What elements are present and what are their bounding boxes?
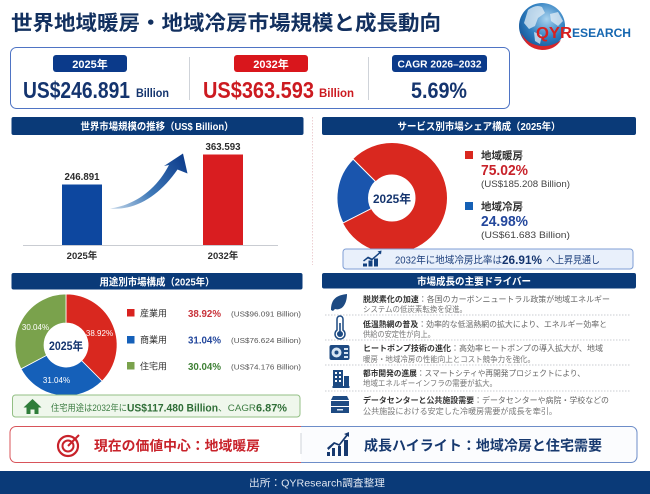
icon: leaf bbox=[331, 294, 347, 311]
highlight: growth: 成長ハイライト：地域冷房と住宅需要 bbox=[364, 438, 602, 454]
panel: growth drivers bbox=[322, 273, 636, 416]
donut chart: application: 30.04% bbox=[22, 323, 49, 332]
legend: district heating bbox=[465, 149, 570, 189]
donut chart: service share bbox=[337, 159, 431, 237]
heading: market size: 世界市場規模の推移（US$ Billion） bbox=[80, 120, 234, 133]
KPI: 2032 value: 2032年 bbox=[253, 57, 289, 71]
heading: market size bbox=[12, 117, 304, 135]
title: 世界地域暖房・地域冷房市場規模と成長動向 bbox=[11, 11, 441, 35]
icon: growth chart bbox=[327, 432, 349, 456]
legend: commercial bbox=[127, 334, 302, 346]
bar: 2025: 2025年 bbox=[67, 250, 98, 262]
icon: target bbox=[58, 435, 79, 456]
legend: district cooling: (US$61.683 Billion) bbox=[481, 230, 570, 240]
logo: QYResearch: ESEARCH bbox=[572, 26, 631, 40]
KPI: 2025 value bbox=[23, 55, 169, 103]
driver: decarbonization: 脱炭素化の加速：各国のカーボンニュートラル政策が地域エネルギー bbox=[363, 294, 610, 304]
icon: server stack bbox=[331, 396, 349, 413]
donut chart: application: 38.92% bbox=[86, 329, 113, 338]
callout: cooling share 2032 bbox=[343, 249, 633, 269]
driver: data centers bbox=[331, 395, 609, 416]
bar: 2025: 246.891 bbox=[64, 171, 100, 183]
legend: residential: 30.04% bbox=[188, 362, 221, 373]
driver: urban development bbox=[330, 368, 585, 388]
bar: 2025 bbox=[62, 171, 102, 262]
legend: district heating: (US$185.208 Billion) bbox=[481, 179, 570, 189]
KPI: CAGR: CAGR 2026–2032 bbox=[398, 60, 482, 70]
legend: district cooling: 24.98% bbox=[481, 213, 528, 230]
callout: residential forecast: 住宅用途は2032年に bbox=[51, 402, 127, 413]
arrow: growth bbox=[110, 154, 188, 209]
highlight: current value bbox=[58, 435, 260, 456]
KPI: 2032 value bbox=[203, 55, 354, 103]
KPI: 2025 value: 2025年 bbox=[72, 57, 108, 71]
dotted separator bbox=[312, 117, 314, 265]
legend: commercial: 商業用 bbox=[140, 334, 167, 345]
panel: service share bbox=[322, 117, 636, 269]
driver: heat pumps: 暖房・地域冷房の性能向上とコスト競争力を強化。 bbox=[363, 354, 535, 364]
KPI: 2032 value: US$363.593 bbox=[203, 77, 314, 103]
legend: district cooling: 地域冷房 bbox=[481, 200, 523, 213]
callout: cooling share 2032: 2032年に地域冷房比率は bbox=[395, 254, 502, 266]
icon: buildings bbox=[330, 370, 350, 388]
panel: application mix bbox=[12, 273, 302, 417]
callout: residential forecast: 6.87% bbox=[256, 402, 287, 414]
legend: commercial: (US$76.624 Billion) bbox=[231, 336, 302, 345]
donut chart: application: 31.04% bbox=[43, 376, 70, 385]
KPI: CAGR bbox=[392, 55, 487, 103]
legend: industrial: 産業用 bbox=[140, 308, 167, 318]
legend: residential: (US$74.176 Billion) bbox=[231, 362, 302, 372]
icon: rising bars bbox=[363, 250, 382, 266]
legend: district heating: 75.02% bbox=[481, 162, 528, 179]
driver: urban development: 地域エネルギーインフラの需要が拡大。 bbox=[363, 378, 497, 388]
logo: QYResearch: QYR bbox=[536, 25, 572, 42]
donut chart: application bbox=[15, 294, 117, 396]
driver: low-temp networks: 低温熱網の普及：効率的な低温熱網の拡大により、エネルギー効率と bbox=[363, 319, 607, 329]
icon: thermometer bbox=[335, 316, 345, 339]
legend: commercial: 31.04% bbox=[188, 336, 221, 346]
callout: residential forecast: US$117.480 Billion bbox=[127, 402, 218, 414]
callout: residential forecast: 、CAGR bbox=[218, 403, 257, 413]
KPI: 2025 value: US$246.891 bbox=[23, 77, 130, 103]
legend: residential bbox=[127, 360, 302, 373]
logo: QYResearch bbox=[519, 3, 631, 50]
driver: data centers: 公共施設における安定した冷暖房需要が成長を牽引。 bbox=[363, 406, 557, 416]
icon: heat pump bbox=[330, 345, 350, 360]
callout: cooling share 2032: へ上昇見通し bbox=[546, 254, 600, 266]
icon: house bbox=[24, 399, 42, 414]
panel: bottom highlights bbox=[10, 426, 637, 462]
driver: low-temp networks: 供給の安定性が向上。 bbox=[363, 329, 435, 339]
driver: decarbonization: システムの低炭素転換を促進。 bbox=[363, 304, 467, 314]
legend: industrial bbox=[127, 308, 302, 320]
legend: industrial: (US$96.091 Billion) bbox=[231, 310, 302, 318]
driver: heat pumps: ヒートポンプ技術の進化：高効率ヒートポンプの導入拡大が、地域 bbox=[363, 343, 603, 353]
legend: residential: 住宅用 bbox=[140, 360, 167, 372]
driver: urban development: 都市開発の進展：スマートシティや再開発プロジェクトにより、 bbox=[363, 368, 585, 378]
driver: low-temp networks bbox=[335, 316, 607, 339]
KPI: 2032 value: Billion bbox=[319, 88, 354, 100]
legend: district heating: 地域暖房 bbox=[481, 149, 523, 162]
bar: 2032: 363.593 bbox=[206, 141, 241, 153]
callout: residential forecast bbox=[12, 395, 300, 417]
heading: service share bbox=[322, 117, 636, 135]
bar: 2032: 2032年 bbox=[208, 250, 239, 262]
donut chart: application: 2025年 bbox=[49, 339, 83, 353]
highlight: current value: 現在の価値中心：地域暖房 bbox=[94, 438, 260, 454]
bar: 2032 bbox=[203, 141, 243, 262]
legend: industrial: 38.92% bbox=[188, 309, 221, 320]
donut chart: service share: 2025年 bbox=[373, 191, 411, 206]
heading: application: 用途別市場構成（2025年） bbox=[100, 276, 214, 288]
callout: cooling share 2032: 26.91% bbox=[502, 253, 542, 267]
heading: drivers bbox=[322, 273, 636, 288]
footer bbox=[0, 471, 650, 494]
driver: decarbonization bbox=[331, 294, 610, 314]
panel: market size trend bbox=[12, 117, 304, 262]
driver: heat pumps bbox=[330, 343, 603, 364]
highlight: growth bbox=[327, 432, 602, 456]
legend: district cooling bbox=[465, 200, 570, 240]
KPI: CAGR: 5.69% bbox=[411, 78, 467, 103]
heading: drivers: 市場成長の主要ドライバー bbox=[417, 275, 531, 288]
heading: application bbox=[12, 273, 302, 290]
footer: 出所：QYResearch調査整理 bbox=[249, 476, 385, 490]
KPI: 2025 value: Billion bbox=[136, 88, 169, 100]
heading: service share: サービス別市場シェア構成（2025年） bbox=[398, 120, 560, 133]
panel: KPI summary bbox=[10, 48, 510, 108]
driver: data centers: データセンターと公共施設需要：データセンターや病院・学校などの bbox=[363, 395, 609, 405]
